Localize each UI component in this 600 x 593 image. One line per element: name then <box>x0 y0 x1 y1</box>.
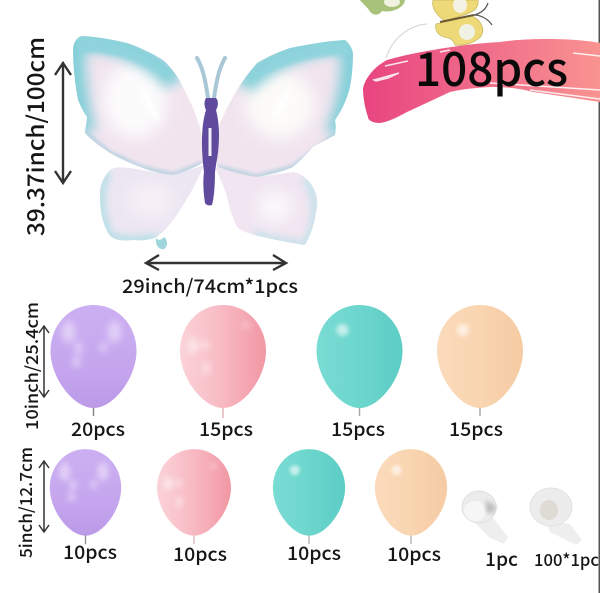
icon: glue dot roll <box>530 488 582 545</box>
brush stroke banner <box>363 39 600 123</box>
large balloon quantity peach: 15pcs <box>449 415 503 442</box>
small balloon quantity peach: 10pcs <box>387 540 441 567</box>
small teal balloon <box>273 449 345 544</box>
small pink balloon <box>157 449 231 544</box>
width label: 29inch/74cm*1pcs <box>122 272 298 299</box>
butterfly body <box>202 98 219 205</box>
10 inch arrow <box>39 326 49 397</box>
balloon valve <box>156 237 167 249</box>
total count heading: 108pcs <box>415 31 568 100</box>
glue dots quantity: 100*1pc <box>534 546 599 571</box>
large peach balloon <box>437 305 523 416</box>
large teal balloon <box>316 305 402 416</box>
small peach balloon <box>375 449 447 544</box>
large balloon quantity 20pcs: 20pcs <box>71 415 125 442</box>
vertical size label: 39.37inch/100cm <box>17 37 51 236</box>
small purple balloon <box>50 449 121 544</box>
lower left wing <box>100 165 204 241</box>
large purple balloon <box>50 305 136 416</box>
upper right wing <box>217 40 353 177</box>
decorative sketch line <box>386 24 427 58</box>
10 inch size label: 10inch/25.4cm <box>18 302 43 430</box>
height arrow <box>55 63 71 183</box>
small balloon quantity purple: 10pcs <box>63 538 117 565</box>
decorative yellow butterfly <box>433 0 492 45</box>
lower right wing <box>215 167 317 245</box>
5 inch arrow <box>39 461 49 532</box>
5 inch size label: 5inch/12.7cm <box>12 447 37 558</box>
antennae <box>197 58 225 98</box>
decorative green butterfly <box>360 0 405 15</box>
wing highlights <box>140 85 290 125</box>
tape quantity: 1pc <box>485 545 518 572</box>
large balloon quantity pink: 15pcs <box>199 415 253 442</box>
small balloon quantity teal: 10pcs <box>287 539 341 566</box>
upper left wing <box>73 36 203 175</box>
width arrow <box>146 255 286 270</box>
icon: balloon tape roll <box>462 491 508 544</box>
small balloon quantity pink: 10pcs <box>173 540 227 567</box>
butterfly foil balloon <box>73 36 353 249</box>
large balloon quantity teal: 15pcs <box>331 415 385 442</box>
large pink balloon <box>180 305 266 418</box>
